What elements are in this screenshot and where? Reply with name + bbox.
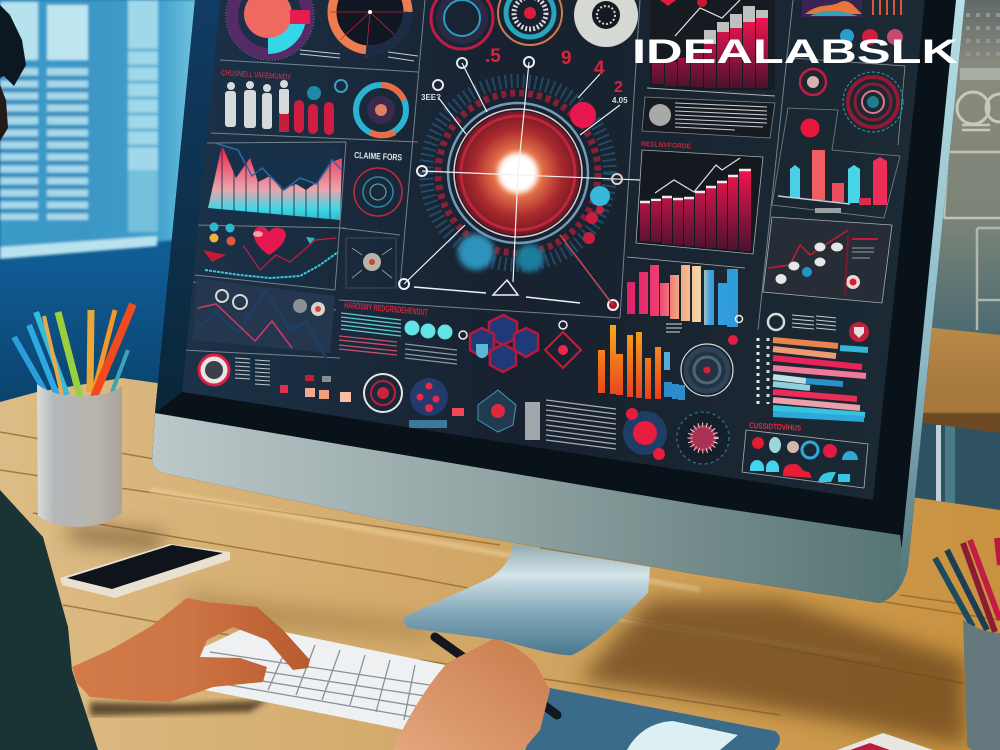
- panel: rising red bars: [636, 141, 763, 254]
- person: right hand with stylus: [393, 637, 557, 750]
- top gauge circles: [431, 0, 638, 49]
- text lines: [675, 103, 767, 130]
- person: head at top left: [0, 5, 26, 141]
- small caption lines: [300, 50, 418, 61]
- panel: lower status strip: [199, 355, 729, 464]
- grey text lines: [405, 344, 457, 364]
- lower text lines: [235, 358, 270, 385]
- bright centre: [498, 153, 538, 193]
- right pencil cup: [935, 538, 1000, 750]
- person: shoulder: [0, 490, 98, 750]
- monitor right edge highlight: [882, 0, 965, 603]
- chart small labels: 4.05: [612, 96, 628, 105]
- panel: concentric target: [792, 58, 905, 145]
- red blob upper right: [570, 102, 596, 128]
- ring chart: people panel: [356, 85, 406, 135]
- dial chart: [681, 335, 738, 396]
- bar chart: orange: [598, 324, 685, 400]
- background: room wall and window: [0, 0, 260, 420]
- window with blinds: [0, 0, 197, 259]
- room behind table: [900, 420, 1000, 515]
- outer particle ring: [426, 81, 610, 265]
- heading: red bars: RESLNVFORDE: [641, 141, 691, 151]
- ring icon: [800, 69, 826, 95]
- side table: [918, 327, 1000, 433]
- pie chart: [226, 0, 314, 60]
- pencils: [935, 538, 1000, 632]
- small blocks: [280, 375, 351, 402]
- panel: text with dial: [642, 97, 775, 138]
- monitor silver chin: [152, 413, 905, 603]
- chart numbers: .5: [485, 46, 501, 67]
- bar chart: coloured pillars: [772, 108, 900, 218]
- wave chart: [802, 0, 862, 17]
- panel: network dots: [763, 217, 892, 303]
- panel: report with hexagons: [339, 300, 581, 372]
- ring: gauge: [364, 374, 402, 412]
- connector lines and nodes: [399, 57, 640, 310]
- pencils: [14, 304, 133, 397]
- desk: [0, 378, 1000, 750]
- red ball: [800, 118, 820, 138]
- blue nebula lower left: [458, 234, 494, 270]
- dotted sphere: [677, 412, 729, 464]
- person: left hand on keyboard: [72, 598, 310, 702]
- monitor: [152, 0, 965, 603]
- diamond icon: [545, 321, 581, 368]
- pink text lines: [339, 336, 397, 355]
- hex icon: [478, 390, 516, 432]
- circuit icon panel: [346, 238, 396, 288]
- chart numbers: 9: [561, 48, 572, 69]
- background: right side wall with sketches: [900, 0, 1000, 515]
- desk shadows: [70, 527, 965, 745]
- panel: claim ring: [354, 150, 402, 216]
- grid text panel: [525, 400, 616, 449]
- social circles: [840, 29, 903, 45]
- cluster: red dots: [410, 378, 448, 416]
- printed sheet corner: [837, 733, 933, 750]
- screen: [182, 0, 925, 500]
- keyboard: [198, 625, 445, 733]
- panel: horizontal bars: [758, 314, 869, 419]
- target: [843, 72, 903, 132]
- bar chart: top right: [647, 0, 775, 96]
- red target: [623, 408, 667, 460]
- heading: claim panel: CLAIME FORS: [354, 150, 402, 163]
- chart small labels: [421, 94, 628, 103]
- heading: legend: CUSSIDTOVIHUS: [749, 421, 802, 433]
- gauge one: [431, 0, 493, 49]
- ring chart: [330, 0, 408, 58]
- chart small labels: 3EE?: [421, 93, 441, 102]
- watermark logo: IDEALABSLK: [632, 33, 959, 71]
- bullet column: [756, 338, 760, 404]
- main radial graphic: [399, 46, 640, 310]
- mouse pad: [525, 688, 780, 750]
- monitor stand: [403, 544, 650, 655]
- gauge two: [498, 0, 562, 45]
- icons: people: [225, 80, 289, 129]
- red dots right: [583, 206, 604, 244]
- bar chart: multicolour: [627, 257, 745, 327]
- ring icon: [354, 168, 402, 216]
- trend lines: [205, 238, 338, 278]
- blue orb right: [590, 186, 610, 206]
- panel: top pie charts: [226, 0, 418, 61]
- small status icons: [203, 222, 315, 262]
- core rings: [448, 103, 588, 243]
- chart numbers: 2: [614, 79, 623, 96]
- paper sheet: [627, 721, 738, 750]
- panel: wave line chart: [193, 278, 335, 358]
- badge ring: [199, 355, 229, 385]
- chart numbers: 4: [594, 58, 605, 79]
- panel: icon legend: [742, 421, 868, 488]
- panel: top right wave and bars: [802, 0, 903, 45]
- mini bars: [873, 0, 901, 15]
- ring and text header: [768, 314, 869, 342]
- smartphone: [60, 544, 230, 598]
- pencil cup with pencils: [14, 304, 133, 527]
- blue nebula lower right: [516, 244, 544, 272]
- dial icon: [649, 104, 671, 126]
- heading: people panel: CHUSNELL VAFEMUNDY: [221, 68, 292, 82]
- teal circles: [404, 320, 452, 340]
- area chart with red peaks: [208, 143, 342, 220]
- hexagons: [470, 315, 538, 372]
- heading: report: HARDSMY REDGRSDEHENDUT: [344, 300, 429, 317]
- panel: heart and trends: [203, 222, 338, 278]
- panel: people figures: [221, 68, 406, 135]
- bars: [773, 340, 868, 419]
- teal text lines: [341, 313, 401, 336]
- core red disc: [456, 111, 580, 235]
- gauge three: [574, 0, 638, 47]
- icon: heart: [254, 227, 286, 255]
- monitor frame: [152, 0, 965, 603]
- chart numbers: [486, 48, 622, 92]
